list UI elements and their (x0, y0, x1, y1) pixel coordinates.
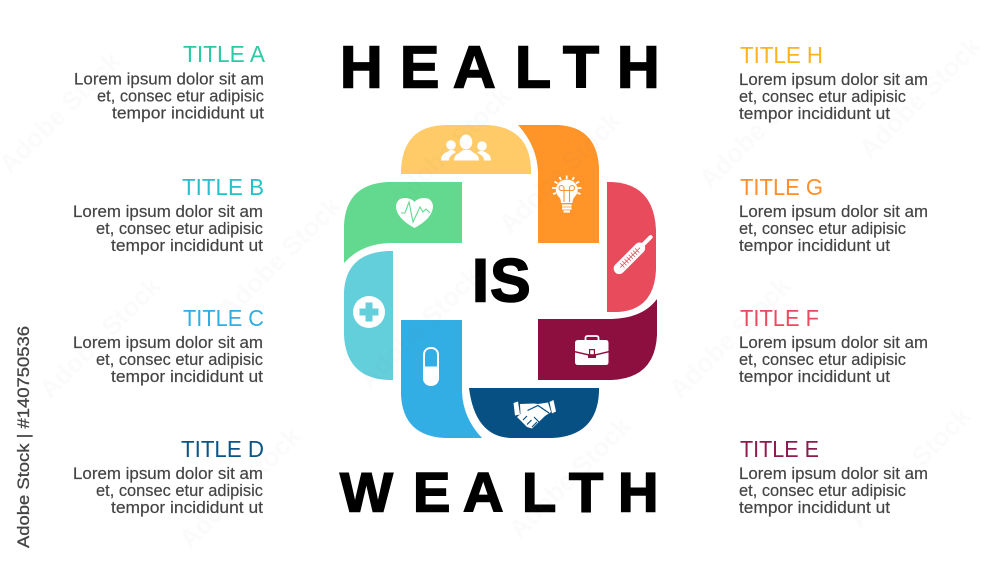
watermark: Adobe Stock (843, 400, 977, 534)
text block: Title G (739, 174, 928, 255)
text block: Title H: tempor incididunt ut (739, 105, 890, 123)
heading: WEALTH: WEALTH (340, 460, 658, 524)
segment: navy with handshake icon (469, 388, 599, 438)
segment: blue with pill icon (401, 320, 482, 438)
text block: Title D (73, 436, 264, 517)
icon: heart with pulse (396, 198, 433, 228)
text block: Title A: Lorem ipsum dolor sit am (74, 70, 264, 88)
segment: cyan with medical cross icon (344, 251, 393, 380)
stock id side label: Adobe Stock | #140750536 (14, 326, 33, 548)
text block: Title E: tempor incididunt ut (739, 499, 890, 517)
text block: Title G: TITLE G (740, 174, 823, 200)
icon: people (441, 134, 491, 160)
text block: Title G: tempor incididunt ut (739, 237, 890, 255)
text block: Title A (74, 41, 266, 122)
text block: Title A: tempor incididunt ut (112, 104, 264, 122)
text block: Title H: Lorem ipsum dolor sit am (739, 71, 928, 89)
watermark: Adobe Stock (663, 270, 797, 404)
icon: medical cross (353, 296, 385, 328)
text block: Title D: et, consec etur adipisic (96, 482, 263, 500)
icon: light bulb (552, 176, 582, 212)
text block: Title D: TITLE D (181, 436, 264, 462)
text block: Title H: TITLE H (740, 42, 823, 68)
text block: Title B: tempor incididunt ut (111, 237, 263, 255)
center word: IS: IS (472, 246, 531, 314)
watermark: Adobe Stock (213, 190, 347, 324)
segment: green with heart icon (344, 182, 462, 263)
text block: Title E (739, 436, 928, 517)
text block: Title C (73, 305, 264, 386)
watermark: Adobe Stock (493, 105, 627, 239)
text block: Title H (739, 42, 928, 123)
segment: orange with light bulb icon (518, 125, 599, 243)
text block: Title D: Lorem ipsum dolor sit am (73, 465, 263, 483)
segment: maroon with briefcase icon (538, 299, 657, 380)
text block: Title B (73, 174, 264, 255)
text block: Title H: et, consec etur adipisic (739, 88, 906, 106)
text block: Title B: et, consec etur adipisic (96, 220, 263, 238)
text block: Title C: TITLE C (183, 305, 264, 331)
icon: pill (423, 347, 439, 386)
text block: Title C: tempor incididunt ut (111, 368, 263, 386)
text block: Title C: et, consec etur adipisic (96, 351, 263, 369)
watermark: Adobe Stock (853, 30, 987, 164)
text block: Title F: TITLE F (740, 305, 819, 331)
text block: Title E: et, consec etur adipisic (739, 482, 906, 500)
text block: Title A: et, consec etur adipisic (97, 88, 264, 106)
watermark: Adobe Stock (353, 260, 487, 394)
segment: red with thermometer icon (607, 182, 656, 312)
watermark: Adobe Stock (503, 410, 637, 544)
watermark: Adobe Stock (33, 270, 167, 404)
watermark: Adobe Stock (383, 80, 517, 214)
text block: Title C: Lorem ipsum dolor sit am (73, 334, 263, 352)
text block: Title A: TITLE A (183, 41, 266, 67)
text block: Title F: tempor incididunt ut (739, 368, 890, 386)
text block: Title F (739, 305, 928, 386)
icon: briefcase (575, 336, 608, 365)
segment: yellow with people icon (401, 125, 531, 174)
text block: Title B: TITLE B (182, 174, 264, 200)
text block: Title E: Lorem ipsum dolor sit am (739, 465, 928, 483)
icon: handshake (514, 400, 556, 428)
text block: Title G: Lorem ipsum dolor sit am (739, 203, 928, 221)
text block: Title G: et, consec etur adipisic (739, 220, 906, 238)
text block: Title F: Lorem ipsum dolor sit am (739, 334, 928, 352)
text block: Title B: Lorem ipsum dolor sit am (73, 203, 263, 221)
text block: Title D: tempor incididunt ut (111, 499, 263, 517)
watermark: Adobe Stock (693, 60, 827, 194)
text block: Title F: et, consec etur adipisic (739, 351, 906, 369)
text block: Title E: TITLE E (740, 436, 819, 462)
heading: HEALTH: HEALTH (340, 34, 660, 100)
watermark: Adobe Stock (173, 420, 307, 554)
icon: thermometer (611, 232, 656, 276)
